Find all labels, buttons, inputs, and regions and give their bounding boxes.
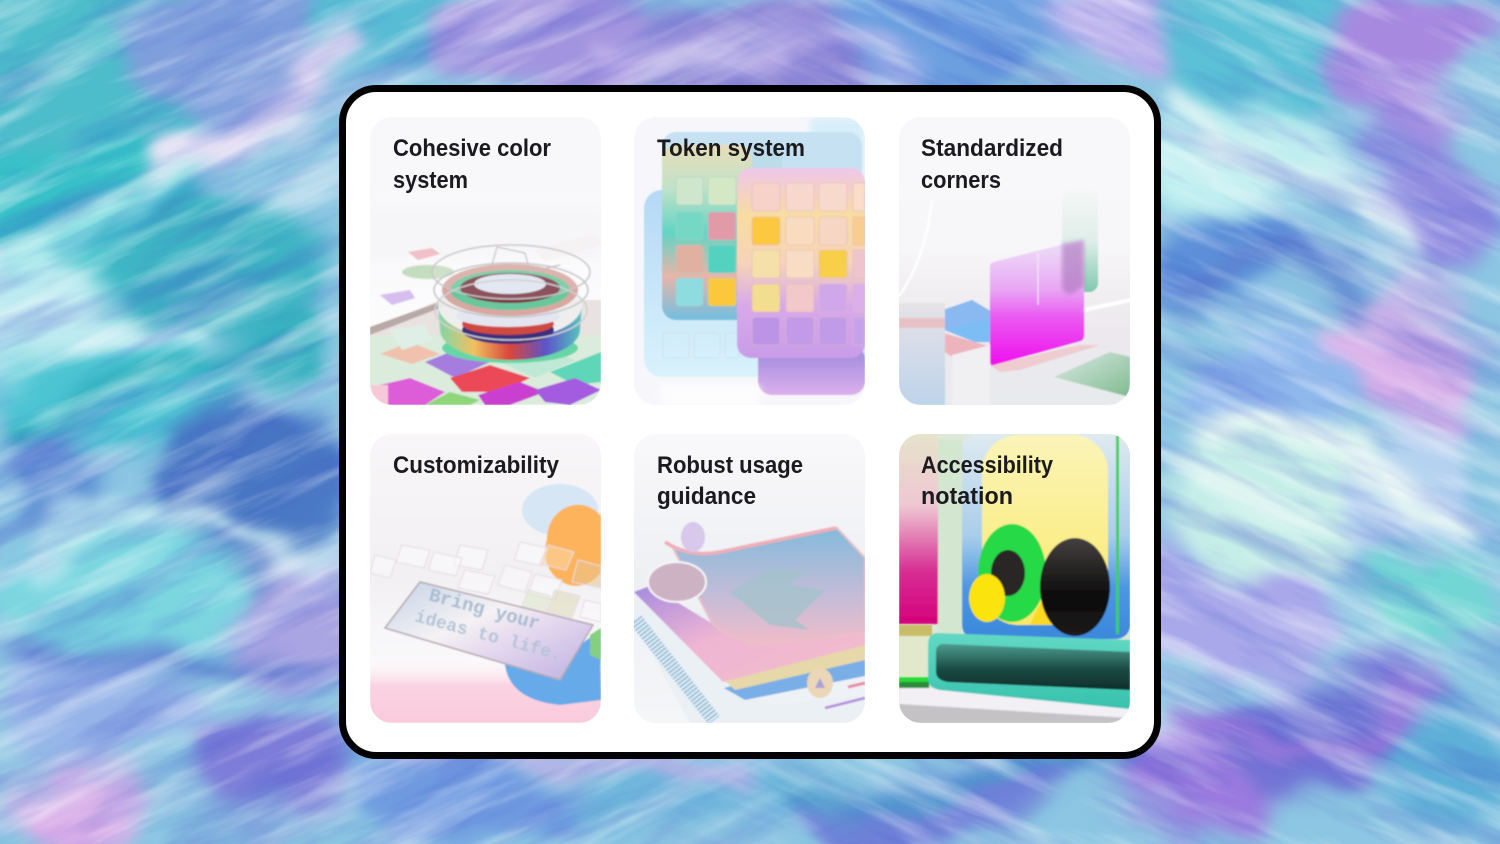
card: Accessibility notation bbox=[899, 434, 1130, 723]
card: Token system bbox=[642, 117, 865, 396]
heading: Accessibility notation: notation bbox=[921, 483, 1013, 510]
heading: Accessibility notation: Accessibility bbox=[921, 452, 1054, 479]
illustration: holographic keyboard: Bring your bbox=[426, 585, 542, 635]
heading: Standardized corners: corners bbox=[921, 167, 1001, 194]
illustration: rounded glass panels bbox=[899, 190, 1130, 405]
card: Robust usage guidance bbox=[634, 434, 865, 723]
heading: Cohesive color system: system bbox=[393, 167, 468, 194]
main white panel bbox=[342, 88, 1158, 756]
illustration: dish on colour tiles bbox=[370, 244, 601, 405]
heading: Customizability: Customizability bbox=[393, 452, 560, 479]
heading: Cohesive color system: Cohesive color bbox=[393, 135, 551, 162]
heading: Robust usage guidance: guidance bbox=[657, 483, 756, 510]
card: Standardized corners bbox=[899, 117, 1130, 405]
heading: Token system: Token system bbox=[657, 135, 805, 162]
illustration: token keypads bbox=[644, 118, 874, 405]
illustration: holographic keyboard: ideas to life. bbox=[412, 607, 564, 666]
illustration: guidance notebook bbox=[634, 522, 865, 723]
card: Customizability bbox=[370, 434, 601, 723]
heading: Robust usage guidance: Robust usage bbox=[657, 452, 803, 479]
heading: Standardized corners: Standardized bbox=[921, 135, 1063, 162]
card: Cohesive color system bbox=[370, 117, 601, 405]
illustration: holographic keyboard bbox=[370, 484, 601, 723]
illustration: contrast discs bbox=[899, 434, 1130, 723]
